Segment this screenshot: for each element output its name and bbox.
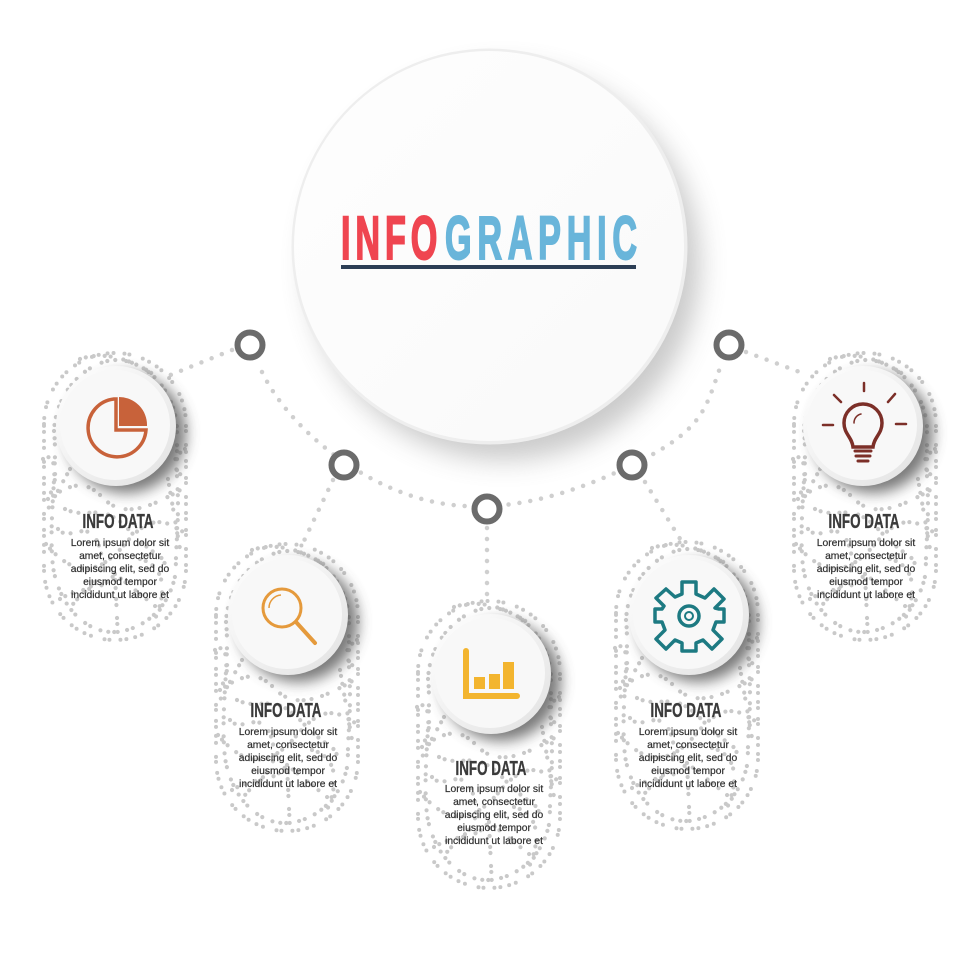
text block: adipiscing elit, sed do bbox=[71, 564, 169, 575]
text block: eiusmod tempor bbox=[83, 577, 157, 588]
text block: Lorem ipsum dolor sit bbox=[445, 784, 543, 795]
text block: eiusmod tempor bbox=[651, 766, 725, 777]
connector ring 1 bbox=[238, 332, 262, 358]
text block: amet, consectetur bbox=[825, 551, 907, 562]
panel: step 5 light bulb bbox=[793, 353, 936, 640]
text block: amet, consectetur bbox=[453, 797, 535, 808]
title: INFO bbox=[341, 205, 437, 273]
panel: step 3 bar chart bbox=[417, 601, 561, 888]
connector ring 2 bbox=[332, 452, 356, 478]
icon: pie chart bbox=[88, 397, 147, 457]
heading: INFO DATA bbox=[650, 700, 722, 722]
text block: Lorem ipsum dolor sit bbox=[817, 538, 915, 549]
title bbox=[341, 205, 637, 273]
main title circle bbox=[292, 48, 700, 460]
connector ring 4 bbox=[620, 452, 644, 478]
text block: adipiscing elit, sed do bbox=[639, 753, 737, 764]
heading: INFO DATA bbox=[456, 758, 526, 780]
text block: adipiscing elit, sed do bbox=[445, 810, 543, 821]
text block: incididunt ut labore et bbox=[71, 590, 169, 601]
text block: incididunt ut labore et bbox=[445, 836, 543, 847]
text block: adipiscing elit, sed do bbox=[817, 564, 915, 575]
connector ring 3 bbox=[474, 496, 500, 522]
icon: light bulb bbox=[823, 383, 906, 461]
dotted connection lines bbox=[168, 350, 805, 600]
heading: INFO DATA bbox=[250, 700, 322, 722]
text block: amet, consectetur bbox=[647, 740, 729, 751]
text block: amet, consectetur bbox=[247, 740, 329, 751]
connector ring 5 bbox=[716, 332, 742, 358]
icon: gear bbox=[655, 582, 724, 651]
panel: step 4 gear bbox=[615, 542, 758, 829]
text block: adipiscing elit, sed do bbox=[239, 753, 337, 764]
heading: INFO DATA bbox=[828, 511, 900, 533]
text block: Lorem ipsum dolor sit bbox=[71, 538, 169, 549]
panel: step 2 magnifier bbox=[215, 544, 358, 831]
text block: eiusmod tempor bbox=[829, 577, 903, 588]
text block: Lorem ipsum dolor sit bbox=[639, 727, 737, 738]
text block: eiusmod tempor bbox=[251, 766, 325, 777]
text block: Lorem ipsum dolor sit bbox=[239, 727, 337, 738]
text block: incididunt ut labore et bbox=[239, 779, 337, 790]
text block: incididunt ut labore et bbox=[639, 779, 737, 790]
heading: INFO DATA bbox=[82, 511, 154, 533]
text block: amet, consectetur bbox=[79, 551, 161, 562]
icon: bar chart bbox=[463, 648, 520, 699]
text block: incididunt ut labore et bbox=[817, 590, 915, 601]
title: GRAPHIC bbox=[445, 205, 637, 273]
icon: magnifying glass bbox=[263, 589, 315, 643]
panel: step 1 pie chart bbox=[43, 353, 186, 640]
text block: eiusmod tempor bbox=[457, 823, 531, 834]
